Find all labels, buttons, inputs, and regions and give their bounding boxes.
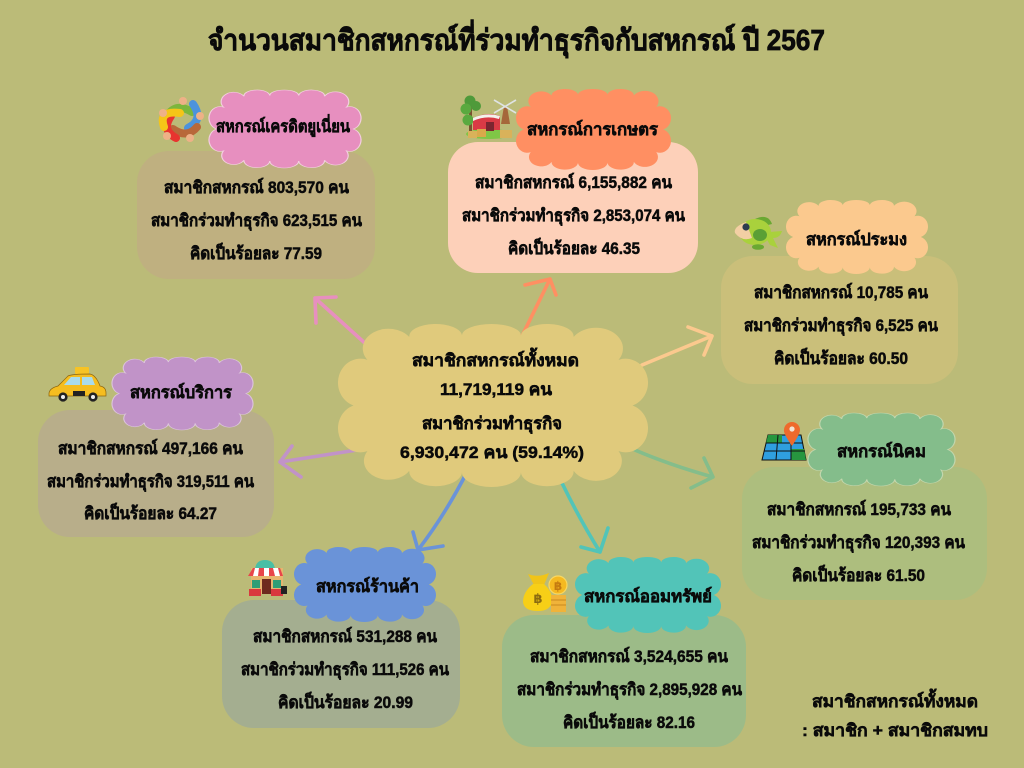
arrow: to savings [562,483,608,552]
note: member definition: : สมาชิก + สมาชิกสมทบ [802,721,988,740]
panel: credit union: คิดเป็นร้อยละ 77.59 [190,241,322,263]
panel: service: สมาชิกร่วมทำธุรกิจ 319,511 คน [47,472,254,492]
panel: settlement [742,413,987,600]
panel: fisheries [721,200,958,384]
central cloud: all members: 11,719,119 คน [440,380,552,399]
icon: money bag and coins: ฿ [533,591,543,606]
panel: shop: สหกรณ์ร้านค้า [316,576,419,596]
central cloud: all members: สมาชิกสหกรณ์ทั้งหมด [412,347,579,370]
arrow: to settlement [635,450,713,488]
central cloud: all members [338,324,648,487]
panel: fisheries: คิดเป็นร้อยละ 60.50 [774,346,908,368]
panel: credit union: สมาชิกร่วมทำธุรกิจ 623,515 คน [151,211,362,231]
note: member definition [802,688,988,740]
panel: savings: สมาชิกสหกรณ์ 3,524,655 คน [530,646,728,666]
panel: service: คิดเป็นร้อยละ 64.27 [84,501,217,523]
panel: shop [222,547,460,728]
panel: shop: สมาชิกร่วมทำธุรกิจ 111,526 คน [241,660,449,680]
icon: farm [460,96,516,139]
panel: savings: สมาชิกร่วมทำธุรกิจ 2,895,928 คน [517,680,742,700]
panel: shop: สมาชิกสหกรณ์ 531,288 คน [253,626,437,646]
icon: shop [248,560,287,596]
panel: service [38,357,274,537]
panel: service: สหกรณ์บริการ [130,382,233,402]
central cloud: all members: 6,930,472 คน (59.14%) [400,443,584,462]
panel: agriculture: คิดเป็นร้อยละ 46.35 [508,236,640,258]
panel: shop: คิดเป็นร้อยละ 20.99 [278,690,413,712]
arrow: to service [280,446,357,477]
icon: fish [735,217,782,250]
arrow: to shop [413,472,467,550]
arrow: to agriculture [520,279,556,340]
panel: savings: สหกรณ์ออมทรัพย์ [584,586,712,606]
panel: settlement: สมาชิกร่วมทำธุรกิจ 120,393 คน [752,533,965,553]
panel: agriculture: สหกรณ์การเกษตร [527,119,659,139]
panel: agriculture [448,89,698,273]
panel: settlement: คิดเป็นร้อยละ 61.50 [792,563,925,585]
arrow: to fisheries [642,327,712,365]
note: member definition: สมาชิกสหกรณ์ทั้งหมด [812,688,978,711]
panel: service: สมาชิกสหกรณ์ 497,166 คน [58,438,243,458]
panel: agriculture: สมาชิกร่วมทำธุรกิจ 2,853,074 คน [462,206,685,226]
panel: agriculture: สมาชิกสหกรณ์ 6,155,882 คน [475,172,672,192]
panel: credit union [137,90,375,279]
panel: credit union: สมาชิกสหกรณ์ 803,570 คน [164,177,349,197]
panel: fisheries: สมาชิกสหกรณ์ 10,785 คน [754,282,928,302]
panel: fisheries: สมาชิกร่วมทำธุรกิจ 6,525 คน [744,316,938,336]
panel: fisheries: สหกรณ์ประมง [806,229,907,249]
icon: taxi [49,367,106,402]
icon: money bag and coins [523,573,567,612]
arrow: to credit union [315,297,367,345]
icon: money bag and coins: ฿ [554,579,562,593]
panel: savings: คิดเป็นร้อยละ 82.16 [563,710,695,732]
central cloud: all members: สมาชิกร่วมทำธุรกิจ [422,414,562,434]
panel: savings [502,557,746,747]
panel: credit union: สหกรณ์เครดิตยูเนี่ยน [216,114,350,138]
panel: settlement: สมาชิกสหกรณ์ 195,733 คน [767,499,951,519]
panel: settlement: สหกรณ์นิคม [837,441,926,461]
title: จำนวนสมาชิกสหกรณ์ที่ร่วมทำธุรกิจกับสหกรณ์ ปี 2567 [208,19,825,58]
icon: map pin [762,422,806,460]
icon: people circle [159,97,204,142]
